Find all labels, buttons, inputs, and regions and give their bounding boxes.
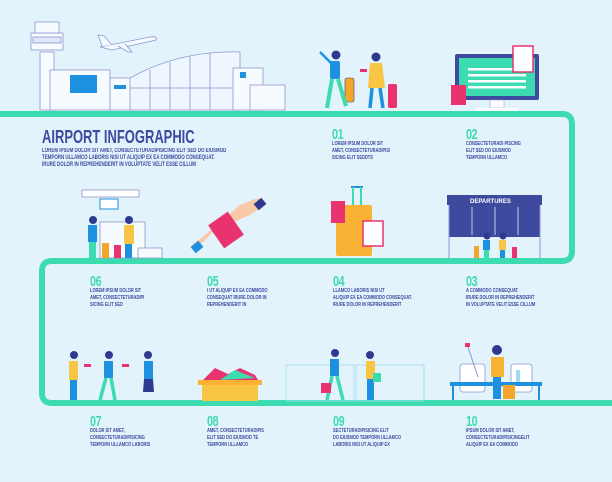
step 08: ELIT SED DO EIUSMOD TE [207,435,258,441]
step 10: IPSUM DOLOR SIT AMET, [466,428,515,434]
icon: online check-in monitor [451,46,539,111]
step 10: CONSECTETURADIPISICINGELIT [466,435,530,441]
step 06: 06 [90,273,101,290]
step 01: LOREM IPSUM DOLOR SIT [332,141,383,147]
step 03 [466,273,535,308]
step 06: SICING ELIT SED [90,302,123,308]
step 03: A COMMODO CONSEQUAT. [466,288,519,294]
step 09 [333,413,401,448]
step 05: CONSEQUAT IRURE DOLOR IN [207,295,266,301]
step 03: IRURE DOLOR IN REPREHENDERIT [466,295,534,301]
icon: people handing tickets [69,351,154,400]
step 04: IRURE DOLOR IN REPREHENDERIT [333,302,401,308]
step 10: ALIQUIP EX EA COMMODO [466,442,518,448]
step 08 [207,413,264,448]
step 06 [90,273,144,308]
step 04: ALIQUIP EX EA COMMODO CONSEQUAT. [333,295,412,301]
step 07: CONSECTETURADIPISICING [90,435,145,441]
step 03: 03 [466,273,477,290]
path: timeline road [0,114,612,403]
step 05: I UT ALIQUIP EX EA COMMODO [207,288,268,294]
step 09: 09 [333,413,344,430]
step 02 [466,126,521,161]
step 07 [90,413,150,448]
step 09: LABORIS NISI UT ALIQUIP EX [333,442,390,448]
icon: hands exchanging passport [191,198,266,253]
title: AIRPORT INFOGRAPHIC [42,127,195,147]
step 01: SICING ELIT SEDDTS [332,155,373,161]
intro text: TEMPORN ULLAMCO LABORIS NISI UT ALIQUIP EX EA COMMODO CONSEQUAT. [42,155,215,161]
intro text [42,148,226,168]
icon: airport building [31,22,285,110]
step 04 [333,273,412,308]
step 08: 08 [207,413,218,430]
icon: departures board: DEPARTURES [470,199,511,205]
step 06: LOREM IPSUM DOLOR SIT [90,288,141,294]
step 10: 10 [466,413,477,430]
step 08: AMET, CONSECTETURADIPIS [207,428,264,434]
icon: check-in desk [82,190,162,258]
step 07: 07 [90,413,101,430]
step 07: DOLOR SIT AMET, [90,428,125,434]
icon: waiting bench with selfie [450,343,542,400]
step 03: IN VOLUPTATE VELIT ESSE CILLUM [466,302,535,308]
step 08: TEMPORN ULLAMCO [207,442,248,448]
step 09: DO EIUSMOD TEMPORN ULLAMCO [333,435,401,441]
step 05: REPREHENDERIT IN [207,302,246,308]
step 07: TEMPORN ULLAMCO LABORIS [90,442,150,448]
step 06: AMET, CONSECTETURADIPI [90,295,144,301]
step 01: 01 [332,126,343,143]
step 10 [466,413,530,448]
step 04: LLAMCO LABORIS NISI UT [333,288,385,294]
step 02: ELIT SED DO EIUSMOD [466,148,511,154]
step 02: 02 [466,126,477,143]
step 05: 05 [207,273,218,290]
icon: departures board [447,195,542,258]
icon: travellers with luggage [320,50,397,108]
step 01 [332,126,390,161]
intro text: LOREM IPSUM DOLOR SIT AMET, CONSECTETURADIPISICING ELIT SED DO EIUSMOD [42,148,226,154]
icon: suitcase with passport [331,186,383,256]
icon: duty-free basket [198,368,262,401]
icon: shopping area [286,349,424,401]
step 01: AMET, CONSECTETURADIPISI [332,148,390,154]
control tower [31,22,63,110]
step 09: SECTETURADIPISICING ELIT [333,428,389,434]
step 04: 04 [333,273,344,290]
step 05 [207,273,268,308]
step 02: TEMPORN ULLAMCO [466,155,507,161]
intro text: IRURE DOLOR IN REPREHENDERIT IN VOLUPTATE VELIT ESSE CILLUM [42,162,196,168]
icon: airplane [98,35,156,52]
step 02: CONSECTETURADI PISCING [466,141,521,147]
